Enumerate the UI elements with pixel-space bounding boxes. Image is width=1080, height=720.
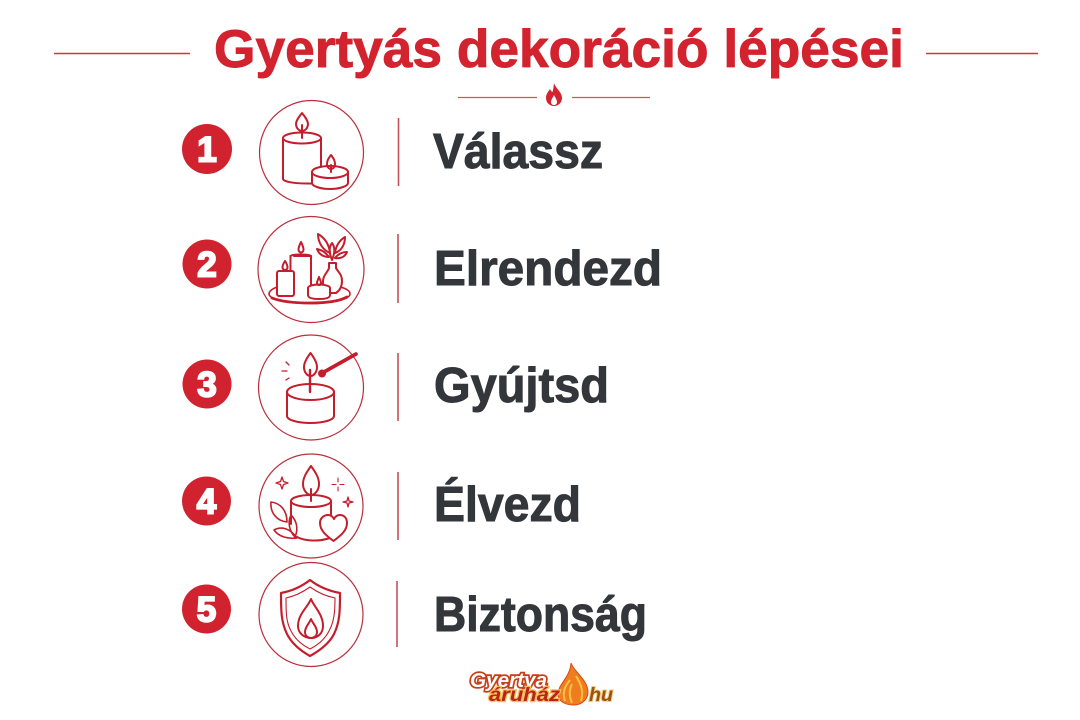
divider bbox=[398, 118, 400, 186]
label: Elrendezd bbox=[434, 242, 662, 296]
title: Gyertyás dekoráció lépései bbox=[214, 20, 904, 79]
logo bbox=[470, 663, 613, 706]
number badge 5: 5 bbox=[197, 590, 216, 630]
divider bbox=[397, 234, 399, 303]
divider bbox=[397, 472, 399, 540]
number badge 1 bbox=[182, 124, 232, 174]
divider bbox=[397, 353, 399, 421]
icon: lighting a candle with a match bbox=[258, 335, 364, 440]
step 1 bbox=[182, 100, 603, 204]
number badge 4: 4 bbox=[197, 482, 217, 522]
step 5 bbox=[182, 562, 647, 666]
logo: áruház bbox=[489, 685, 561, 706]
divider bbox=[396, 581, 398, 647]
number badge 4 bbox=[182, 476, 231, 526]
number badge 5 bbox=[182, 584, 231, 634]
number badge 2: 2 bbox=[197, 246, 217, 284]
number badge 3 bbox=[182, 360, 232, 408]
step 2 bbox=[182, 216, 662, 322]
step 3 bbox=[182, 335, 609, 440]
label: Válassz bbox=[433, 125, 603, 179]
step 4 bbox=[182, 454, 581, 558]
logo: Gyertya bbox=[470, 670, 547, 692]
number badge 1: 1 bbox=[197, 130, 217, 170]
label: Gyújtsd bbox=[434, 359, 609, 413]
number badge 2 bbox=[182, 240, 232, 288]
icon: candles on tray with vase bbox=[258, 216, 364, 322]
logo: hu bbox=[589, 685, 613, 706]
label: Élvezd bbox=[434, 478, 581, 532]
icon: two candles bbox=[260, 100, 364, 204]
title ornament with flame icon bbox=[458, 83, 650, 106]
logo flame bbox=[558, 663, 588, 705]
label: Biztonság bbox=[434, 588, 647, 642]
number badge 3: 3 bbox=[197, 366, 217, 404]
icon: candle with heart and leaves bbox=[259, 454, 363, 558]
icon: shield with flame bbox=[259, 562, 363, 666]
